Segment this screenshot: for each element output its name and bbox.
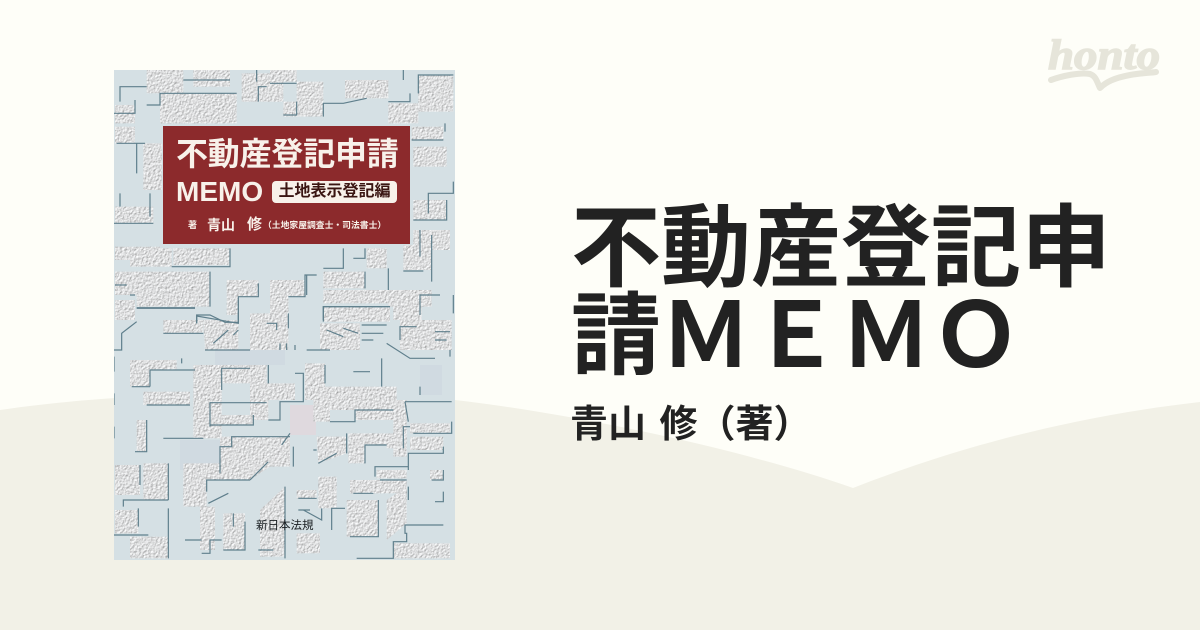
book cover — [114, 70, 455, 560]
author: 青山 修（著） — [570, 404, 812, 446]
title — [571, 199, 1111, 387]
cover edition label — [272, 181, 397, 203]
cover author line: 修 — [247, 216, 262, 233]
cover author line — [188, 216, 386, 233]
cover edition label: 土地表示登記編 — [278, 183, 390, 200]
cover title panel — [163, 126, 410, 244]
cover author line: （土地家屋調査士・司法書士） — [263, 220, 386, 230]
cover title text: 不動産登記申請 — [176, 136, 399, 172]
publisher name: 新日本法規 — [256, 520, 314, 532]
cover author line: 著 — [188, 220, 197, 230]
cover author line: 青山 — [207, 217, 235, 233]
logo: honto: honto — [1048, 33, 1160, 79]
title: 請ＭＥＭＯ — [571, 287, 1021, 387]
dark emboss lines — [114, 70, 453, 558]
title: 不動産登記申 — [571, 199, 1111, 299]
cover subtitle: MEMO: MEMO — [176, 176, 263, 207]
cover texture — [114, 70, 454, 559]
